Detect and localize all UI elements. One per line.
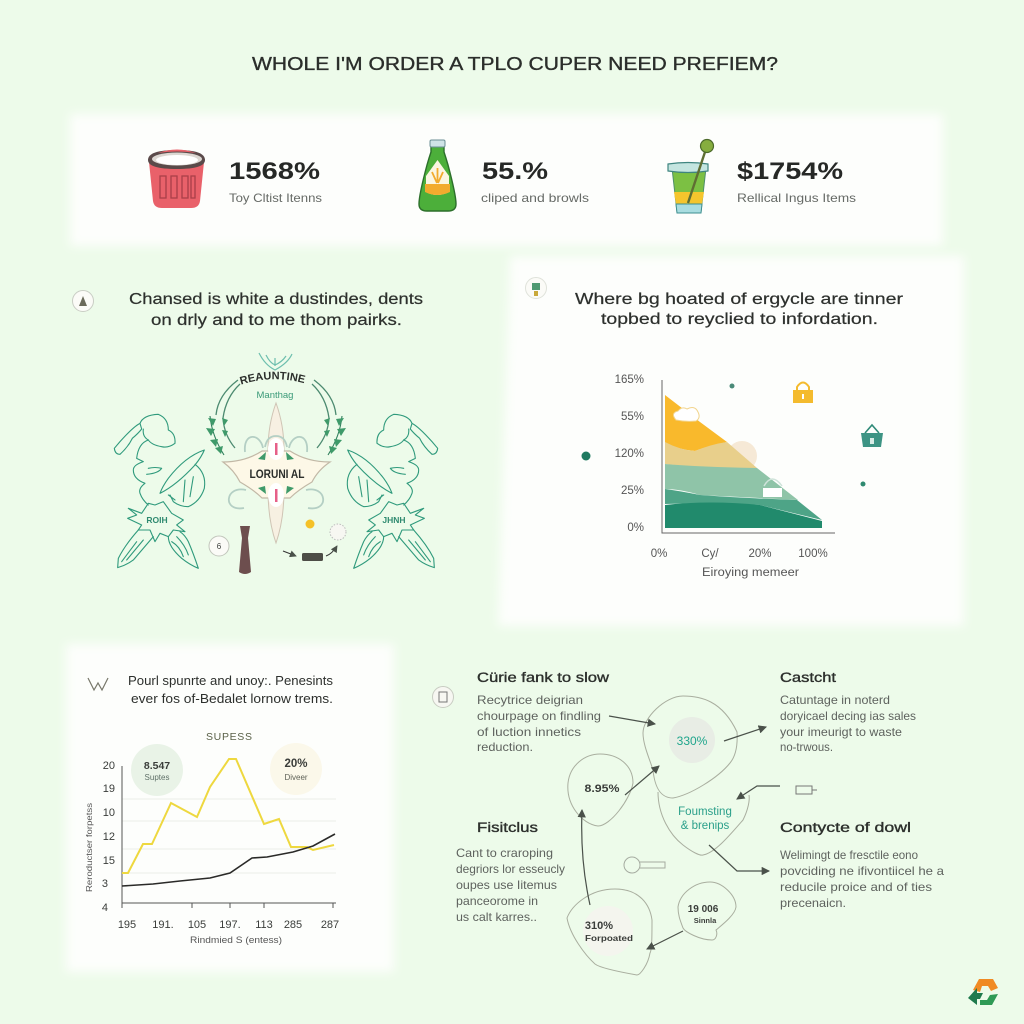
x labels	[651, 548, 828, 560]
icon: green bottle	[419, 140, 456, 211]
blob: bottom left	[567, 889, 652, 975]
stat: $1754%: Rellical Ingus Items	[737, 191, 856, 205]
x labels: 20%	[748, 548, 772, 560]
x labels: 191.	[152, 919, 174, 931]
panel: top statistics background	[70, 114, 943, 246]
panel: right area chart background	[498, 256, 964, 626]
heading: left section	[129, 291, 423, 329]
stat: 1568%	[229, 158, 322, 205]
y labels: 55%	[621, 411, 644, 423]
badge: small coin: 6	[217, 542, 222, 551]
text block: top left: reduction.	[477, 740, 533, 754]
callout: left circle	[131, 744, 183, 796]
badge: small coin	[209, 536, 229, 556]
wreath title: REAUNTINE	[240, 372, 306, 384]
y labels: 0%	[627, 522, 644, 534]
x labels	[118, 919, 339, 931]
blob: bottom left: 310%	[585, 920, 613, 932]
small elements	[258, 452, 294, 494]
text block: top left: chourpage on findling	[477, 709, 601, 723]
blob: bottom left: Forpoated	[585, 934, 633, 943]
callout: left circle: 8.547	[144, 760, 170, 772]
x labels: 0%	[651, 548, 667, 560]
text block: top right	[780, 670, 916, 754]
y labels: 19	[103, 783, 115, 795]
text block: bottom right: precenaicn.	[780, 896, 846, 910]
y labels: 20	[103, 760, 115, 772]
yellow series	[122, 759, 334, 873]
icon: flow badge	[432, 686, 454, 708]
heading: right section: Where bg hoated of ergycle are tinner	[575, 291, 903, 308]
right figure	[347, 414, 438, 568]
text block: top right: your imeurigt to waste	[780, 725, 902, 739]
callout: right circle: Diveer	[284, 773, 308, 782]
dark green layer	[665, 502, 822, 528]
x labels: 197.	[219, 919, 241, 931]
text block: top right: Castcht	[780, 670, 836, 685]
blob: bottom right: 19 006	[688, 904, 719, 915]
x labels: 113	[255, 919, 273, 931]
text block: bottom right: reducile proice and of ties	[780, 880, 932, 894]
text block: bottom left: panceorome in	[456, 894, 538, 908]
text block: bottom right: Welimingt de fresctile eono	[780, 848, 918, 862]
text block: top right: no-trwous.	[780, 740, 833, 754]
y labels: 12	[103, 831, 115, 843]
stat: $1754%	[737, 158, 856, 205]
heading: line chart: ever fos of-Bedalet lornow trems.	[131, 691, 333, 706]
y labels	[615, 374, 644, 534]
icon: key	[624, 857, 665, 873]
stat: 55.%: 55.%	[482, 158, 548, 185]
text block: top left: of luction innetics	[477, 725, 581, 739]
line chart	[84, 743, 339, 946]
y labels: 25%	[621, 485, 644, 497]
y labels: 10	[103, 807, 115, 819]
side curls	[229, 436, 323, 508]
text block: top right: Catuntage in noterd	[780, 693, 890, 707]
chart title: SUPESS	[206, 731, 252, 743]
flow diagram	[567, 696, 817, 975]
illustration: botanical emblem	[114, 352, 438, 574]
icon: tie brush	[239, 526, 251, 574]
icon: yellow lock	[793, 382, 813, 403]
black series	[122, 834, 335, 886]
left figure	[114, 414, 205, 568]
icon: bag	[763, 479, 782, 497]
stat: 55.%: cliped and browls	[481, 191, 589, 205]
stat: $1754%: $1754%	[737, 158, 843, 185]
x labels: 285	[284, 919, 302, 931]
icon: cloud	[673, 408, 699, 421]
stat: 1568%: Toy Cltist Itenns	[229, 191, 322, 205]
text block: bottom right: Contycte of dowl	[780, 820, 911, 835]
icon: recycle logo	[968, 979, 998, 1005]
blob: bottom right: Sinnla	[694, 916, 717, 925]
y labels: 15	[103, 855, 115, 867]
text block: bottom left: oupes use Iitemus	[456, 878, 557, 892]
text block: bottom left: degriors lor esseucly	[456, 862, 565, 876]
callout: left circle: Suptes	[145, 773, 169, 782]
text block: bottom left	[456, 820, 565, 924]
icon: right section badge	[526, 278, 546, 298]
x labels: Cy/	[701, 548, 719, 560]
callout: right circle	[270, 743, 322, 795]
x axis title: Rindmied S (entess)	[190, 935, 282, 946]
text block: bottom right	[780, 820, 944, 910]
area chart	[615, 374, 835, 579]
x labels: 287	[321, 919, 339, 931]
centre plaque	[223, 451, 330, 498]
y labels: 165%	[615, 374, 644, 386]
title: WHOLE I'M ORDER A TPLO CUPER NEED PREFIEM?	[252, 54, 778, 74]
faded highlight	[727, 441, 757, 471]
text block: top left: Recytrice deigrian	[477, 693, 583, 707]
tan layer	[665, 442, 757, 468]
text block: top left	[477, 670, 609, 754]
text block: top left: Cürie fank to slow	[477, 670, 609, 685]
heading: right section: topbed to reyclied to infordation.	[601, 311, 878, 328]
icon: red bin	[148, 150, 205, 208]
icon: line chart badge	[88, 678, 108, 690]
x labels: 105	[188, 919, 206, 931]
chart decoration dots	[582, 384, 866, 486]
light green layer	[665, 464, 798, 500]
blob: lower	[658, 792, 749, 855]
stat: 55.%	[481, 158, 589, 205]
x labels: 100%	[798, 548, 828, 560]
callout: right circle: 20%	[284, 758, 308, 770]
axes	[122, 766, 336, 908]
text block: bottom left: Fisitclus	[477, 820, 538, 835]
yellow layer	[665, 395, 727, 451]
text block: bottom left: us calt karres..	[456, 910, 537, 924]
panel: bottom left line chart background	[66, 644, 394, 972]
plaque label: LORUNI AL	[250, 469, 304, 481]
icon: cup with straw	[668, 140, 714, 213]
icon: small tag	[796, 786, 817, 794]
blob: main	[643, 696, 737, 798]
blob: left	[568, 754, 633, 826]
blob: left: 8.95%	[584, 783, 620, 795]
heading: right section	[575, 291, 903, 328]
y labels: 120%	[615, 448, 644, 460]
blob: bottom right	[678, 882, 736, 940]
axes	[662, 380, 835, 533]
y labels: 3	[102, 878, 108, 890]
blob: main: 330%	[677, 734, 708, 748]
heading: left section: on drly and to me thom pairks.	[151, 312, 402, 329]
heading: left section: Chansed is white a dustindes, dents	[129, 291, 423, 308]
y labels: 4	[102, 902, 108, 914]
arrows	[582, 716, 780, 949]
mid green layer	[665, 489, 822, 520]
text block: bottom left: Cant to craroping	[456, 846, 553, 860]
illustration: botanical emblem: JHNH	[382, 515, 406, 525]
y labels	[102, 760, 115, 914]
wreath	[216, 380, 336, 448]
blob: lower: & brenips	[681, 820, 730, 832]
x labels: 195	[118, 919, 136, 931]
heading: line chart	[128, 673, 333, 706]
arrow process	[283, 524, 346, 561]
blob: lower: Foumsting	[678, 806, 732, 818]
icon: teal basket	[861, 425, 883, 447]
figure labels: ROIH	[146, 515, 168, 525]
stat: 1568%: 1568%	[229, 158, 320, 185]
y axis title: Reroductser forpetss	[84, 803, 94, 892]
text block: top right: doryicael decing ias sales	[780, 709, 916, 723]
top ornament	[259, 353, 292, 370]
icon: left section badge	[72, 290, 94, 312]
heading: line chart: Pourl spunrte and unoy:. Penesints	[128, 673, 333, 688]
wreath subtitle: Manthag	[257, 390, 293, 401]
x axis title: Eiroying memeer	[702, 567, 799, 579]
centre spear	[268, 403, 284, 543]
text block: bottom right: povciding ne ifivontiicel he a	[780, 864, 944, 878]
